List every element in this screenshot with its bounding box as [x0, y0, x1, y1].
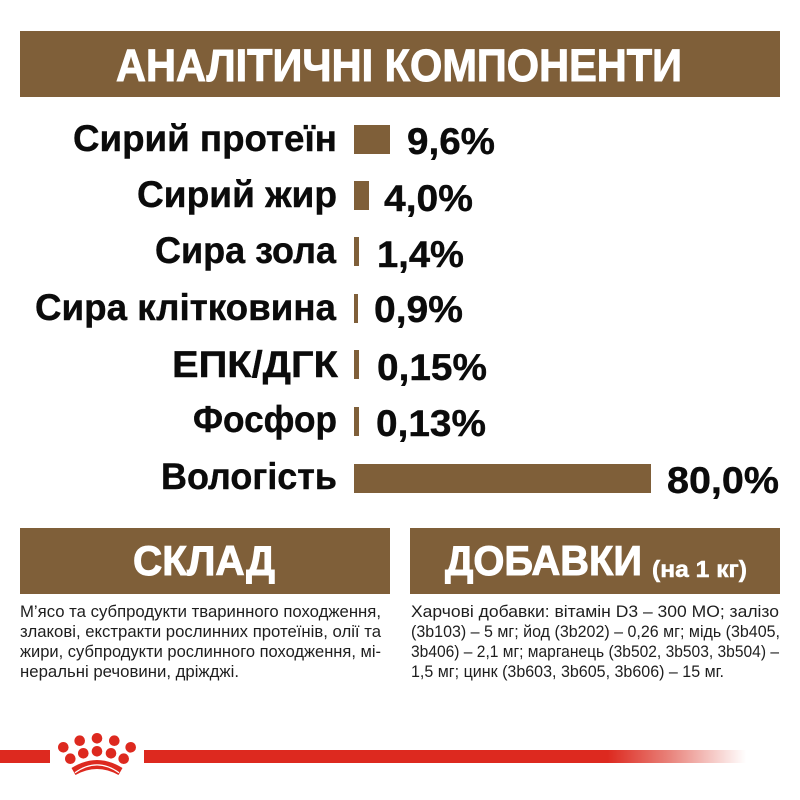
text block: additives [411, 602, 780, 681]
heading: composition [20, 528, 390, 594]
row: crude fibre: 0,9% [374, 289, 463, 330]
text block: additives: Харчові добавки: вітамін D3 – 300 МО; залізо [411, 602, 779, 621]
text block: additives: (3b103) – 5 мг; йод (3b202) – 0,26 мг; мідь (3b405, [411, 622, 780, 641]
row: crude fat: Сирий жир [137, 174, 337, 215]
row: crude ash: Сира зола [155, 230, 336, 271]
row: crude protein: 9,6% [407, 121, 495, 162]
text block: composition: неральні речовини, дріжджі. [20, 662, 239, 681]
row: crude fat: 4,0% [384, 178, 473, 219]
title banner: АНАЛІТИЧНІ КОМПОНЕНТИ [116, 40, 682, 91]
row: phosphorus: Фосфор [193, 399, 337, 440]
row: crude protein [73, 118, 495, 162]
heading: composition: СКЛАД [133, 537, 275, 584]
text block: additives: 1,5 мг; цинк (3b603, 3b605, 3b606) – 15 мг. [411, 662, 724, 681]
red footer stripe [0, 750, 746, 763]
row: crude protein: Сирий протеїн [73, 118, 337, 159]
row: moisture: Вологість [161, 456, 337, 497]
title banner [20, 31, 780, 97]
row: phosphorus [193, 399, 486, 444]
panel: additives [410, 528, 780, 681]
text block: composition: М’ясо та субпродукти тваринного походження, [20, 602, 381, 621]
row: moisture [161, 456, 779, 501]
panel: composition [20, 528, 390, 681]
row: crude ash [155, 230, 464, 275]
text block: composition [20, 602, 382, 681]
row: EPA/DHA: ЕПК/ДГК [172, 344, 338, 385]
icon: royal crown logo [58, 733, 136, 775]
row: EPA/DHA [172, 344, 487, 388]
heading: additives [410, 528, 780, 594]
heading: additives: ДОБАВКИ [445, 537, 642, 584]
row: moisture: 80,0% [667, 460, 779, 501]
row: EPA/DHA: 0,15% [377, 347, 487, 388]
text block: composition: злакові, екстракти рослинних протеїнів, олії та [20, 622, 382, 641]
bar chart: analytical components [35, 118, 779, 501]
row: phosphorus: 0,13% [376, 403, 486, 444]
row: crude fibre [35, 287, 463, 330]
row: crude fibre: Сира клітковина [35, 287, 336, 328]
row: crude ash: 1,4% [377, 234, 464, 275]
heading: additives: (на 1 кг) [652, 556, 747, 582]
row: crude fat [137, 174, 473, 219]
text block: composition: жири, субпродукти рослинного походження, мі- [20, 642, 381, 661]
